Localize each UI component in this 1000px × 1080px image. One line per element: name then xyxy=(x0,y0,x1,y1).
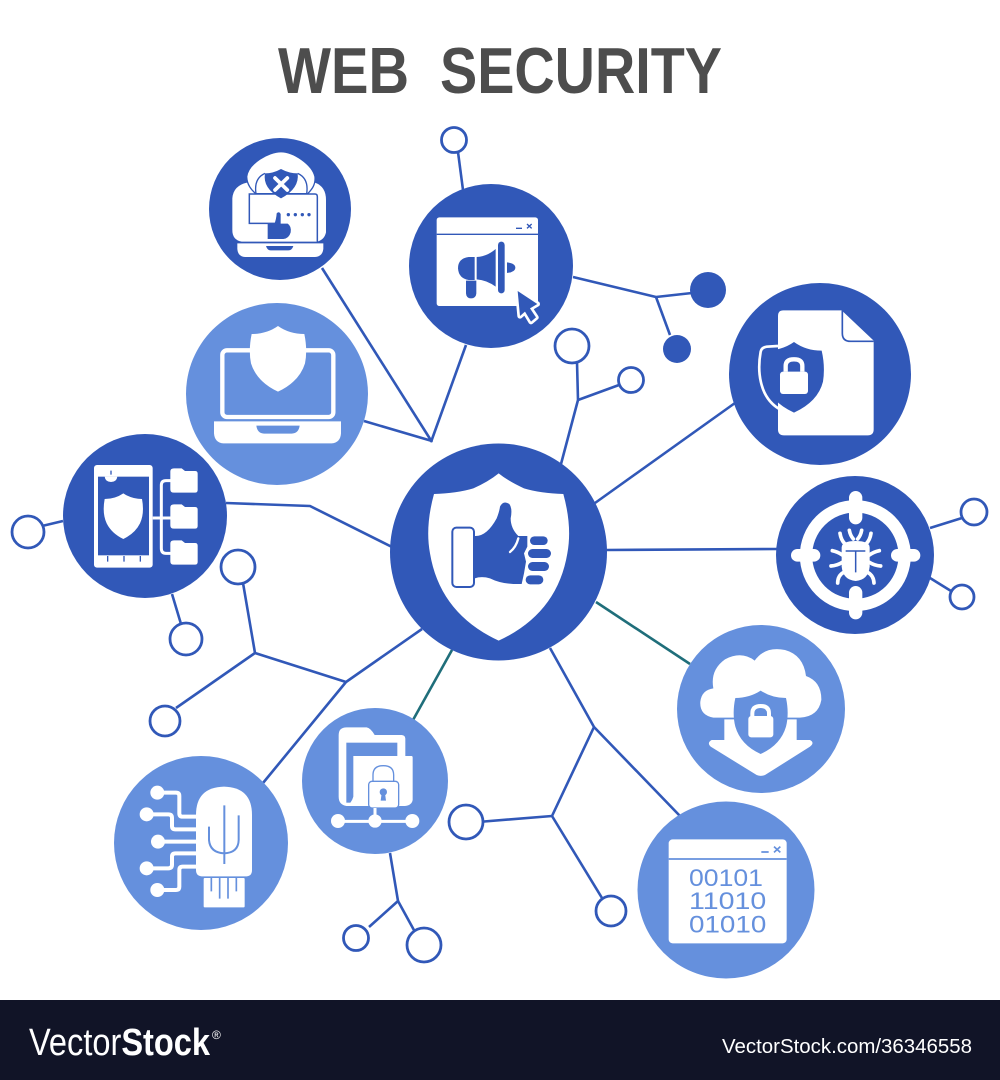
icon: cloud lock xyxy=(677,625,845,793)
icon: binary code window xyxy=(638,802,814,978)
icon: document lock shield xyxy=(729,283,911,465)
connector network xyxy=(42,152,962,932)
title: WEB xyxy=(278,34,409,107)
footer bar xyxy=(0,1000,1000,1080)
title: SECURITY xyxy=(440,34,722,107)
icon: hacker laptop xyxy=(209,138,351,280)
icon: binary code window: 01010 xyxy=(689,912,766,938)
icon: binary code window: 11010 xyxy=(689,889,766,915)
icon: laptop shield xyxy=(186,303,368,485)
icon: binary code window: 00101 xyxy=(689,866,763,892)
footer logo: VectorStock xyxy=(29,1022,211,1064)
icon: usb chip xyxy=(114,756,288,930)
icon: bug target xyxy=(776,476,934,634)
footer logo: ® xyxy=(212,1028,221,1042)
icon: phone shield folders xyxy=(63,434,227,598)
icon: folder lock xyxy=(302,708,448,854)
footer id: VectorStock.com/36346558 xyxy=(722,1036,972,1058)
network nodes xyxy=(12,128,987,962)
title xyxy=(278,34,722,107)
icon: central shield thumbs up xyxy=(390,444,607,660)
icon: browser megaphone xyxy=(409,184,573,348)
